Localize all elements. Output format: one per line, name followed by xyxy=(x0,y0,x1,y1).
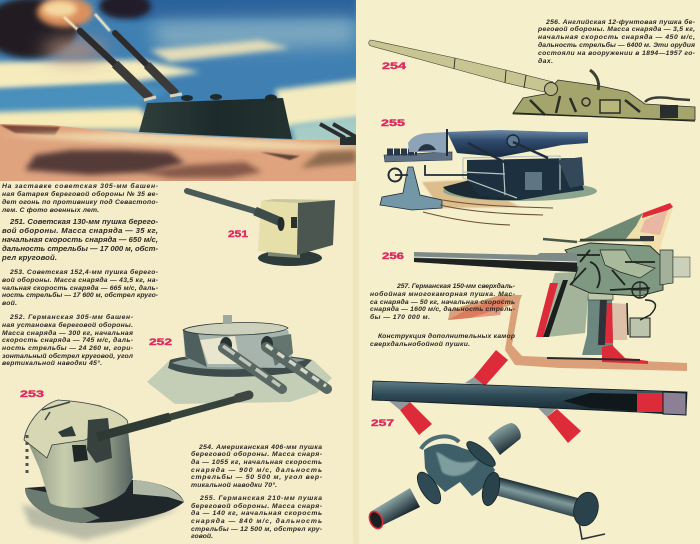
text: 253 description xyxy=(2,268,159,307)
text: 252 description: зонтальный обстрел круговой, угол xyxy=(2,352,134,360)
text: 257 description: нобойная многокаморная пушка. Мас- xyxy=(370,290,516,298)
breech mechanism xyxy=(565,243,663,296)
central body xyxy=(424,444,495,496)
text: 257 description xyxy=(370,282,516,321)
text: 254 description: снаряда — 900 м/с, дальность xyxy=(191,466,322,474)
ground xyxy=(0,124,356,181)
text: 251 description xyxy=(1,217,158,262)
text: 256 description: начальная скорость снаряда — 450 м/с, xyxy=(538,33,695,41)
text: 252 description: Масса снаряда — 300 кг, начальная xyxy=(2,329,133,337)
gun 252 xyxy=(147,315,332,404)
text: cover caption: лем. С фото военных лет. xyxy=(1,207,99,214)
muzzle ring xyxy=(367,509,385,531)
text: cover caption: На заставке советская 305-мм башен- xyxy=(2,182,159,190)
section drawing of barrel with side chambers xyxy=(371,350,687,443)
text: 253 description: чальная скорость снаряда — 665 м/с, даль- xyxy=(2,284,159,292)
text: chambers caption: сверхдальнобойной пушки. xyxy=(370,340,470,348)
text: chambers caption: Конструкция дополнительных камор xyxy=(378,332,515,340)
label 256: 256 xyxy=(382,251,404,261)
gun 255 xyxy=(380,118,597,225)
text: 256 description xyxy=(537,18,696,65)
text: 253 description: вой обороны. Масса снаряда — 43,5 кг, на- xyxy=(2,276,159,284)
shield xyxy=(577,203,673,258)
gun 251 xyxy=(187,191,335,266)
sky xyxy=(0,0,356,140)
text: 252 description: ная установка береговой обороны. xyxy=(2,321,133,329)
end cap xyxy=(570,490,602,528)
text: 252 description: 252. Германская 305-мм башен- xyxy=(9,313,134,321)
barrel xyxy=(414,252,577,272)
text: 251 description: рел круговой. xyxy=(1,253,57,262)
text: 251 description: вой обороны. Масса снаряда — 35 кг, xyxy=(2,226,158,235)
flanges xyxy=(421,436,459,449)
text: 255 description: 255. Германская 210-мм пушка xyxy=(199,495,322,502)
distant battery barrels xyxy=(320,124,356,145)
gun 254 xyxy=(369,40,695,121)
text: 255 description: снаряда — 840 м/с, дальность xyxy=(191,517,322,525)
text: 253 description: ность стрельбы — 17 600 м, обстрел круго- xyxy=(2,291,159,299)
label 255: 255 xyxy=(381,118,405,128)
illustration: coastal battery firing xyxy=(0,0,370,181)
text: 256 description: реговой обороны. Масса снаряда — 3,5 кг, xyxy=(537,25,695,33)
label 253: 253 xyxy=(20,389,44,399)
text: 257 description: бы — 170 000 м. xyxy=(370,313,430,321)
text: 253 description: вой. xyxy=(2,299,17,307)
text: 256 description: 256. Английская 12-фунтовая пушка бе- xyxy=(545,18,696,26)
text: cover caption xyxy=(1,182,159,214)
text: cover caption: ная батарея береговой обороны № 35 ве- xyxy=(2,190,159,198)
text: 257 description: са снаряда — 50 кг, начальная скорость xyxy=(370,298,515,306)
gun 253 xyxy=(20,389,249,540)
text: 253 description: 253. Советская 152,4-мм пушка берего- xyxy=(9,268,159,276)
text: 252 description xyxy=(2,313,134,367)
text: 254 description: да — 1055 кг, начальная скорость xyxy=(191,458,322,466)
label 257: 257 xyxy=(371,418,394,428)
text: chambers caption xyxy=(370,332,515,348)
muzzle tube xyxy=(370,488,420,528)
label 251: 251 xyxy=(228,229,248,239)
upper right tube xyxy=(488,423,521,455)
text: 257 description: снаряда — 1600 м/с, дальность стрель- xyxy=(370,305,516,313)
text: 254 description: 254. Американская 406-мм пушка xyxy=(198,444,322,451)
folding bracket xyxy=(579,522,605,539)
text: 257 description: 257. Германская 150-мм сверхдаль- xyxy=(396,282,516,290)
text: cover caption: дет огонь по противнику под Севастопо- xyxy=(2,198,159,206)
main turret with twin barrels xyxy=(80,31,292,139)
text: 255 description: береговой обороны. Масса снаря- xyxy=(191,502,323,510)
text: 256 description: дах. xyxy=(538,57,553,65)
text: 252 description: вертикальной наводки 45°. xyxy=(2,359,102,367)
ground line and pink wedge xyxy=(448,295,687,371)
text: 256 description: дальность стрельбы — 6400 м. Эти орудия xyxy=(538,41,695,49)
text: 252 description: скорость снаряда — 745 м/с, даль- xyxy=(2,336,134,344)
smoke and muzzle flash xyxy=(0,0,151,60)
text: 256 description: состояли на вооружении в 1894—1957 го- xyxy=(538,50,696,57)
text: 255 description xyxy=(191,495,323,540)
label 254: 254 xyxy=(382,61,406,71)
text: 252 description: ность стрельбы — 24 260 м, гори- xyxy=(2,344,134,352)
text: 254 description xyxy=(191,444,323,489)
text: 251 description: начальная скорость снаряда — 650 м/с, xyxy=(2,235,158,244)
text: 255 description: стрельбы — 12 500 м, обстрел кру- xyxy=(191,525,323,533)
label 252: 252 xyxy=(149,337,172,347)
text: 251 description: дальность стрельбы — 17 000 м, обст- xyxy=(2,244,158,253)
text: 254 description: стрельбы — 50 500 м, угол вер- xyxy=(191,473,323,481)
skirt xyxy=(536,272,588,337)
gun 256 xyxy=(382,203,690,371)
text: 251 description: 251. Советская 130-мм пушка берего- xyxy=(9,217,158,226)
rear tube xyxy=(495,476,578,517)
chamber gun assembly xyxy=(367,423,605,539)
text: 254 description: тикальной наводки 70°. xyxy=(191,481,277,489)
text: 255 description: да — 140 кг, начальная скорость xyxy=(191,509,322,517)
text: 254 description: береговой обороны. Масса снаря- xyxy=(191,450,323,458)
pedestal xyxy=(612,303,627,340)
text: 255 description: говой. xyxy=(191,532,213,540)
